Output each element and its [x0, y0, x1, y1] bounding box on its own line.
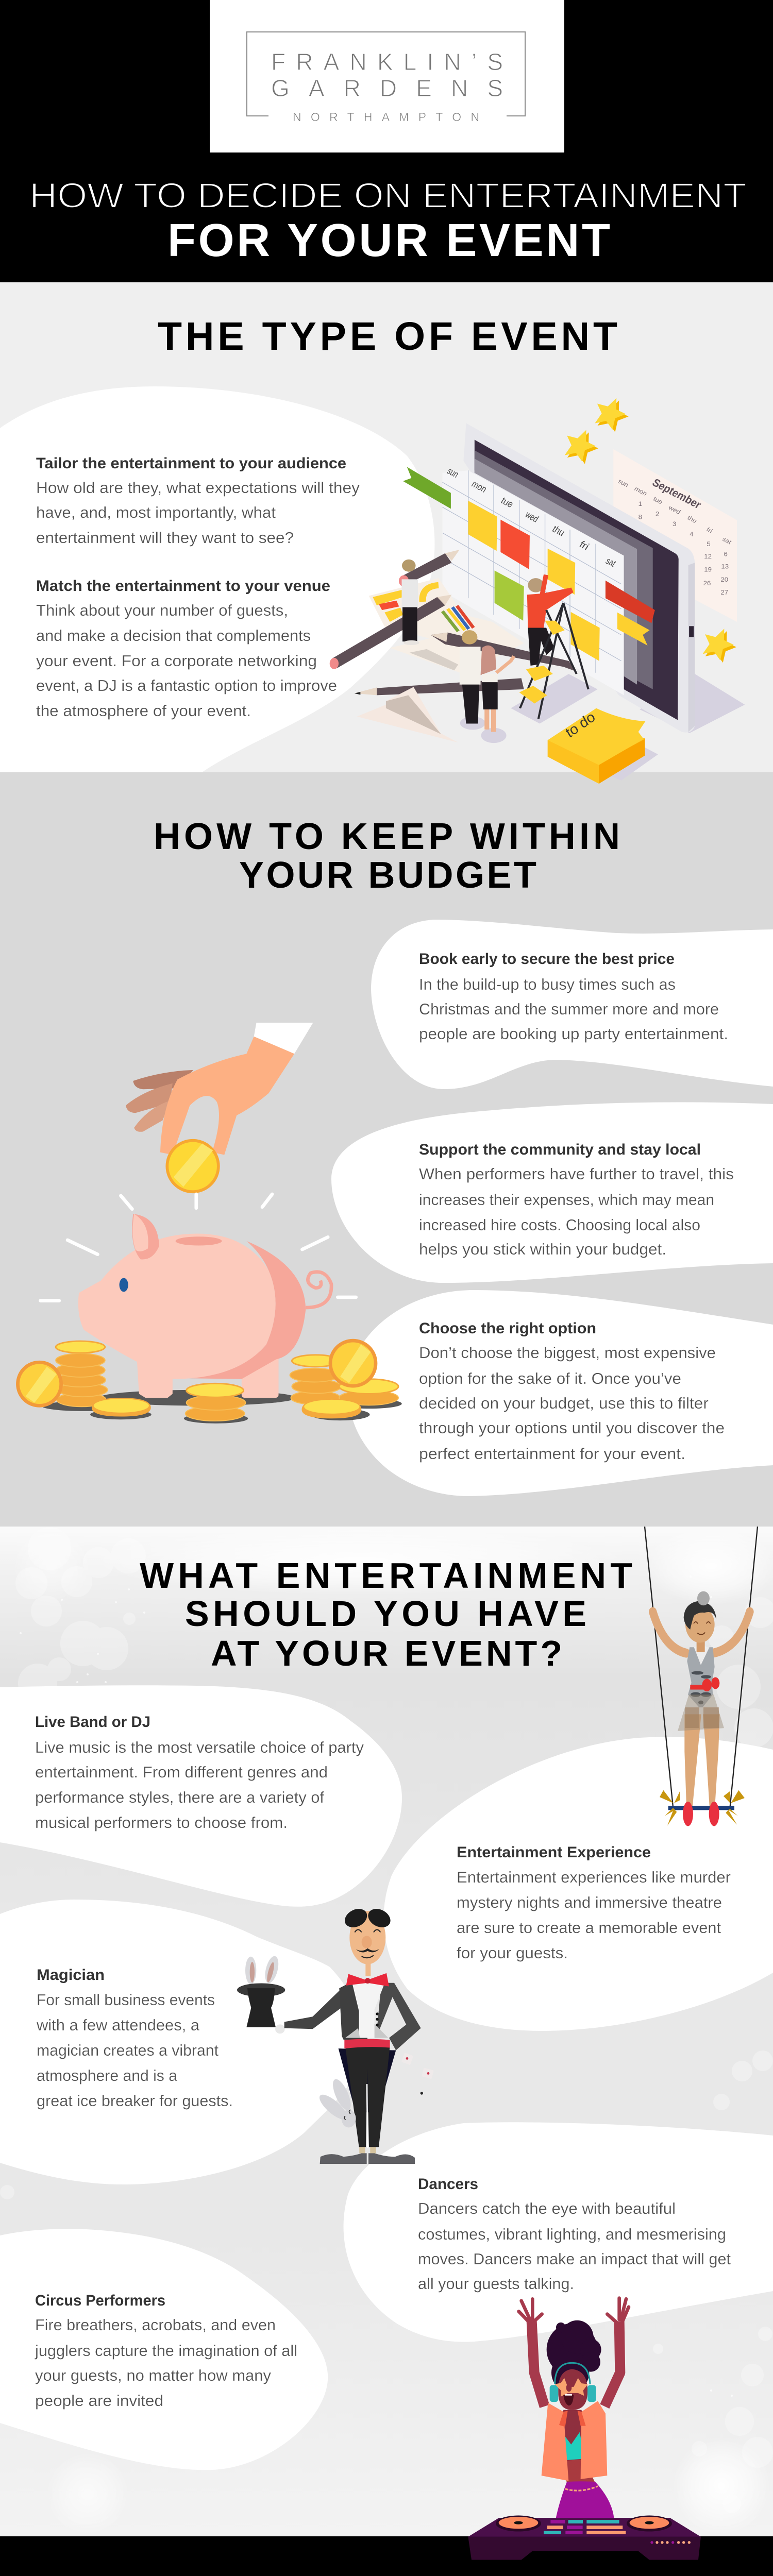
text block: book early: Christmas and the summer more and more	[419, 1000, 719, 1018]
back calendar: sun	[616, 478, 630, 488]
text block: support local: increases their expenses, which may mean	[419, 1191, 714, 1209]
back calendar: 12	[704, 553, 712, 560]
hand with coin	[126, 1023, 313, 1192]
text block: entertainment experience: for your guests.	[457, 1944, 568, 1962]
illustration: DJ	[468, 2298, 701, 2560]
back calendar: 19	[704, 566, 712, 573]
logo: NORTHAMPTON	[293, 110, 479, 124]
text block: right option: Choose the right option	[419, 1320, 596, 1337]
text block: live band: entertainment. From different genres and	[35, 1763, 328, 1781]
back calendar: 8	[638, 514, 642, 520]
person with pencil	[401, 560, 419, 645]
calendar sheet and grid: sat	[603, 555, 618, 569]
text block: right option: decided on your budget, use this to filter	[419, 1394, 709, 1412]
text block: magician: For small business events	[37, 1991, 215, 2009]
ribbons	[403, 467, 655, 646]
heading	[154, 816, 620, 896]
text block: magician: great ice breaker for guests.	[37, 2092, 233, 2110]
back calendar: 1	[638, 501, 642, 507]
text block: magician: magician creates a vibrant	[37, 2041, 219, 2059]
text block: magician: with a few attendees, a	[36, 2016, 200, 2034]
calendar sheet and grid: sun	[445, 466, 461, 480]
text block: book early: Book early to secure the best price	[419, 951, 675, 968]
text block: circus performers: your guests, no matter how many	[35, 2366, 271, 2384]
text block: entertainment experience: mystery nights and immersive theatre	[457, 1893, 722, 1911]
illustration: trapeze artist	[645, 1527, 758, 1826]
text block: circus performers	[35, 2292, 297, 2410]
text block: live band: performance styles, there are a variety of	[35, 1788, 324, 1806]
paper plane	[357, 687, 458, 742]
back calendar: September	[650, 476, 704, 511]
text block: dancers: Dancers	[418, 2176, 478, 2193]
text block: book early	[419, 951, 728, 1043]
text block: match: and make a decision that complements	[36, 626, 311, 645]
text block: entertainment experience	[457, 1844, 731, 1962]
panel: what entertainment should you have	[0, 1525, 773, 2560]
text block: entertainment experience: are sure to create a memorable event	[457, 1919, 721, 1937]
piggy bank	[78, 1214, 331, 1405]
back calendar: 3	[673, 521, 676, 528]
text block: right option: option for the sake of it. Once you’ve	[419, 1369, 681, 1387]
text block: right option: through your options until you discover the	[419, 1419, 725, 1437]
coin stacks	[18, 1341, 402, 1423]
back calendar: thu	[686, 514, 698, 524]
title	[29, 176, 747, 266]
blob: circus performers	[0, 2229, 328, 2470]
text block: book early: people are booking up party entertainment.	[419, 1025, 728, 1043]
text block: support local: When performers have further to travel, this	[419, 1165, 734, 1183]
DJ performer	[519, 2298, 629, 2519]
text block: entertainment experience: Entertainment experiences like murder	[457, 1868, 731, 1886]
pencils	[330, 550, 577, 695]
top hat with rabbit ears	[237, 1955, 285, 2033]
calendar sheet and grid	[443, 466, 624, 695]
heading: THE TYPE OF EVENT	[158, 314, 617, 359]
text block: right option: perfect entertainment for your event.	[419, 1445, 685, 1463]
to do note: to do	[562, 709, 599, 740]
blob: book early	[371, 920, 773, 1089]
back calendar: sat	[721, 536, 733, 546]
stars	[559, 393, 741, 665]
back calendar: 5	[707, 541, 711, 548]
text block: entertainment experience: Entertainment Experience	[457, 1844, 651, 1861]
text block: right option	[419, 1320, 725, 1463]
title: HOW TO DECIDE ON ENTERTAINMENT	[29, 176, 747, 215]
text block: live band	[35, 1714, 364, 1832]
heading: WHAT ENTERTAINMENT	[140, 1555, 632, 1596]
back calendar: 13	[721, 563, 729, 570]
floor shadows	[460, 674, 745, 781]
text block: support local	[419, 1141, 734, 1258]
text block: circus performers: jugglers capture the imagination of all	[35, 2342, 297, 2360]
heading	[140, 1555, 632, 1673]
text block: match: Match the entertainment to your venue	[36, 578, 330, 595]
text block: circus performers: Circus Performers	[35, 2292, 165, 2309]
back calendar	[613, 449, 737, 622]
DJ deck	[468, 2516, 701, 2560]
back calendar: 20	[720, 577, 728, 583]
blob: text background	[0, 386, 434, 772]
text block: tailor: How old are they, what expectations will they	[36, 479, 360, 497]
performer	[653, 1591, 750, 1826]
heading: YOUR BUDGET	[239, 855, 536, 896]
text block: match	[36, 578, 337, 720]
back calendar: 27	[720, 589, 728, 596]
back calendar: 2	[656, 511, 659, 517]
text block: tailor: have, and, most importantly, what	[36, 503, 276, 521]
text block: book early: In the build-up to busy times such as	[419, 975, 676, 993]
text block: dancers: moves. Dancers make an impact that will get	[418, 2250, 731, 2268]
to do note	[548, 708, 645, 784]
text block: match: your event. For a corporate networking	[36, 652, 317, 670]
two people standing	[460, 630, 514, 732]
text block: support local: Support the community and stay local	[419, 1141, 701, 1158]
blob: live band	[0, 1685, 402, 1907]
blob: dancers	[344, 2122, 773, 2342]
person on ladder	[519, 574, 589, 719]
tablet	[463, 423, 695, 733]
calendar sheet and grid: fri	[577, 539, 591, 552]
text block: magician: atmosphere and is a	[37, 2066, 178, 2084]
back calendar: 4	[690, 531, 694, 538]
heading: HOW TO KEEP WITHIN	[154, 816, 620, 857]
text block: tailor: entertainment will they want to see?	[36, 529, 294, 547]
text block: dancers: costumes, vibrant lighting, and mesmerising	[418, 2225, 726, 2243]
text block: match: Think about your number of guests,	[36, 601, 288, 619]
heading: SHOULD YOU HAVE	[185, 1594, 586, 1634]
trapeze ropes and bar	[645, 1527, 758, 1826]
calendar sheet and grid: wed	[523, 509, 541, 524]
logo: GARDENS	[271, 75, 503, 101]
title: FOR YOUR EVENT	[167, 215, 610, 266]
text block: match: the atmosphere of your event.	[36, 702, 251, 720]
text block: match: event, a DJ is a fantastic option to improve	[36, 676, 337, 694]
logo	[210, 0, 564, 152]
illustration: isometric calendar with people	[330, 393, 745, 784]
illustration: hand, piggy bank and coins	[18, 1023, 402, 1423]
back calendar: mon	[633, 485, 648, 497]
bokeh background	[0, 1527, 773, 2535]
calendar sheet and grid: mon	[469, 479, 489, 495]
calendar sheet and grid: tue	[499, 495, 515, 510]
text block: dancers	[418, 2176, 731, 2293]
sticky notes	[468, 501, 600, 661]
blob: right option	[348, 1290, 773, 1496]
panel: how to keep within your budget	[0, 772, 773, 1526]
floor papers	[369, 578, 524, 674]
panel: header	[0, 0, 773, 282]
text block: dancers: all your guests talking.	[418, 2275, 574, 2293]
calendar sheet and grid: thu	[550, 523, 567, 538]
text block: circus performers: people are invited	[35, 2392, 163, 2410]
text block: live band: Live music is the most versatile choice of party	[35, 1738, 364, 1756]
text block: magician: Magician	[37, 1967, 105, 1984]
back calendar: wed	[667, 504, 682, 516]
blob: magician	[0, 1900, 362, 2184]
text block: live band: musical performers to choose from.	[35, 1814, 288, 1832]
sparkle rays	[40, 1194, 356, 1301]
text block: live band: Live Band or DJ	[35, 1714, 150, 1731]
text block: support local: helps you stick within your budget.	[419, 1240, 666, 1258]
magician figure	[284, 1905, 421, 2164]
back calendar: fri	[705, 526, 714, 535]
text block: support local: increased hire costs. Choosing local also	[419, 1216, 700, 1234]
blob: support local	[331, 1102, 773, 1283]
text block: dancers: Dancers catch the eye with beautiful	[418, 2199, 676, 2217]
back calendar: tue	[652, 496, 664, 505]
panel: the type of event	[0, 282, 773, 784]
back calendar: 26	[703, 580, 711, 587]
back calendar: 6	[724, 551, 728, 557]
text block: circus performers: Fire breathers, acrobats, and even	[35, 2316, 276, 2334]
playing cards	[401, 2053, 434, 2100]
text block: magician	[36, 1967, 233, 2110]
panel: footer	[0, 2536, 773, 2576]
heading: AT YOUR EVENT?	[211, 1633, 562, 1673]
text block: right option: Don’t choose the biggest, most expensive	[419, 1344, 716, 1362]
bunny	[316, 2077, 356, 2127]
text block: tailor: Tailor the entertainment to your audience	[36, 455, 346, 472]
logo: FRANKLIN’S	[271, 48, 503, 75]
blob: entertainment experience	[383, 1737, 773, 2031]
text block: tailor	[36, 455, 360, 547]
illustration: magician	[237, 1905, 434, 2164]
